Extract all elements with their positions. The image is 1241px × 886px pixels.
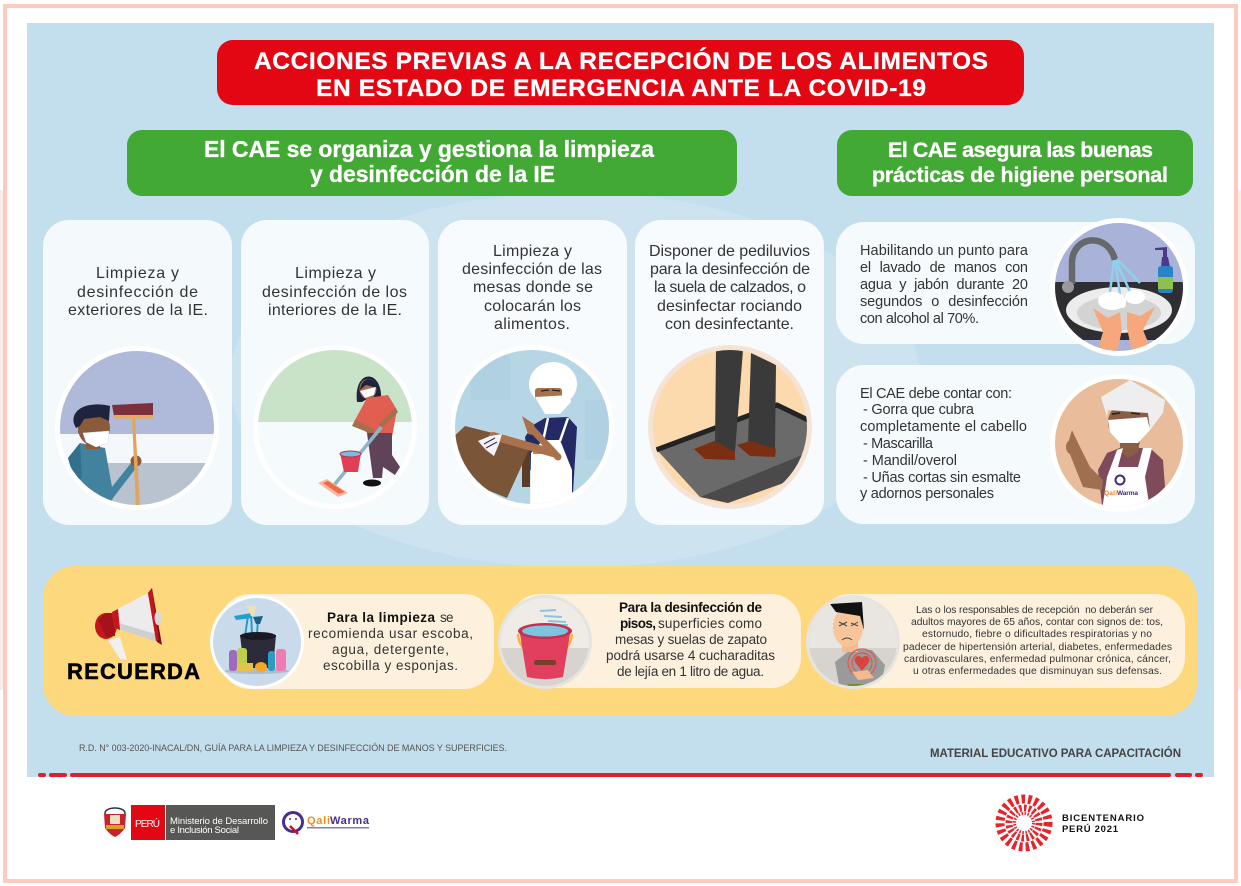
icon: lavado de manos xyxy=(1050,218,1188,356)
text: implementos: - Mandil/overol xyxy=(863,453,957,469)
text: desinfección: Para la desinfección de xyxy=(619,600,762,615)
text: lavado de manos: segundos o desinfección xyxy=(860,294,1028,310)
panel: limpieza de interiores xyxy=(241,220,429,525)
text: implementos: - Uñas cortas sin esmalte xyxy=(863,470,1021,486)
text: lavado de manos xyxy=(860,243,1029,327)
text: interiores: desinfección de los xyxy=(262,284,407,301)
text: responsables: estornudo, fiebre o dificultades respiratorias y no xyxy=(922,629,1152,640)
callout: responsables de recepción xyxy=(806,594,1185,692)
text: mesas: desinfección de las xyxy=(462,261,602,278)
text: implementos: y adornos personales xyxy=(860,486,994,502)
text: pediluvios: para la desinfección de xyxy=(650,261,810,278)
text: responsables: cardiovasculares, enfermedad pulmonar crónica, cáncer, xyxy=(904,654,1171,665)
panel: pediluvios xyxy=(635,220,824,525)
heading: higiene personal: El CAE asegura las buenas xyxy=(888,138,1153,162)
text: desinfección: mesas y suelas de zapato xyxy=(615,632,767,647)
text: desinfección: pisos, xyxy=(620,616,656,631)
panel: limpieza de exteriores xyxy=(43,220,232,525)
heading: higiene personal: prácticas de higiene personal xyxy=(872,163,1168,187)
text: implementos: - Mascarilla xyxy=(863,436,934,452)
icon: persona limpiando mesa xyxy=(455,350,609,504)
text: limpieza: se xyxy=(440,610,454,625)
text: material educativo: MATERIAL EDUCATIVO PARA CAPACITACIÓN xyxy=(930,747,1181,760)
text: pediluvios: Disponer de pediluvios xyxy=(649,243,810,260)
icon: persona con mandil xyxy=(1050,374,1188,512)
text: exteriores xyxy=(68,265,208,319)
text: mesas: alimentos. xyxy=(494,316,570,333)
text: implementos: - Gorra que cubra xyxy=(863,402,975,418)
icon: productos de limpieza xyxy=(210,595,304,689)
text: exteriores: desinfección de xyxy=(77,284,198,301)
text: desinfección: de lejía en 1 litro de agua. xyxy=(617,664,764,679)
text: pediluvios: desinfectar rociando xyxy=(657,298,802,315)
text: responsables xyxy=(903,605,1172,677)
icon: pies en pediluvio xyxy=(648,345,815,510)
title banner: EN ESTADO DE EMERGENCIA ANTE LA COVID-19 xyxy=(316,75,926,102)
text: responsables: padecer de hipertensión arterial, diabetes, enfermedades xyxy=(903,642,1172,653)
logo: ministerio: Ministerio de Desarrollo xyxy=(170,816,268,827)
logo: QaliWarma en mandil xyxy=(1104,476,1138,497)
text: interiores xyxy=(262,265,407,319)
heading: limpieza y desinfección xyxy=(127,130,737,196)
text: limpieza xyxy=(308,610,473,673)
text: responsables: adultos mayores de 65 años, contar con signos de: tos, xyxy=(911,617,1163,628)
panel: lavado de manos xyxy=(836,218,1195,356)
logo: ministerio: PERÚ xyxy=(135,817,160,830)
text: interiores: interiores de la IE. xyxy=(268,302,402,319)
text: referencia normativa: R.D. N° 003-2020-INACAL/DN, GUÍA PARA LA LIMPIEZA Y DESINFECCIÓN DE MANOS Y SUPERFICIES. xyxy=(79,743,507,753)
text: implementos: completamente el cabello xyxy=(860,419,1027,435)
text: mesas: colocarán los xyxy=(484,298,581,315)
title banner xyxy=(217,40,1024,105)
callout: desinfección xyxy=(498,594,801,690)
text: lavado de manos: con alcohol al 70%. xyxy=(860,311,979,327)
text: pediluvios: la suela de calzados, o xyxy=(654,279,806,296)
text: responsables: Las o los responsables de recepción no deberán ser xyxy=(916,605,1154,616)
logo: escudo del Perú xyxy=(104,808,126,837)
text: lavado de manos: el lavado de manos con xyxy=(860,260,1028,276)
logo: Qali Warma: Warma xyxy=(330,815,370,827)
label: recuerda: RECUERDA xyxy=(67,659,200,684)
text: limpieza: recomienda usar escoba, xyxy=(308,626,473,641)
text: limpieza: Para la limpieza xyxy=(327,610,435,625)
heading: limpieza y desinfección: y desinfección de la IE xyxy=(310,161,555,187)
logo: Qali Warma: Qali xyxy=(307,815,330,827)
text: responsables: u otras enfermedades que disminuyan sus defensas. xyxy=(913,666,1162,677)
text: implementos xyxy=(860,386,1027,502)
logo: QaliWarma en mandil: Warma xyxy=(1117,490,1138,497)
icon: balde con lejía xyxy=(498,595,592,690)
panel: implementos del CAE xyxy=(836,365,1195,524)
text: limpieza: escobilla y esponjas. xyxy=(323,658,458,673)
logo: QaliWarma en mandil: Qali xyxy=(1104,490,1117,497)
panel: recuerda xyxy=(43,566,1197,716)
text: pediluvios xyxy=(649,243,810,333)
callout: limpieza xyxy=(210,594,494,689)
text: limpieza: agua, detergente, xyxy=(332,642,449,657)
text: interiores: Limpieza y xyxy=(295,265,376,282)
logo: Qali Warma xyxy=(284,812,370,834)
text: mesas xyxy=(462,243,602,333)
text: desinfección xyxy=(606,600,775,679)
title banner: ACCIONES PREVIAS A LA RECEPCIÓN DE LOS ALIMENTOS xyxy=(254,47,988,75)
text: implementos: El CAE debe contar con: xyxy=(860,386,1012,402)
red divider line xyxy=(38,773,1203,777)
icon: mujer trapeando xyxy=(253,345,420,510)
logo: Bicentenario xyxy=(1000,799,1144,847)
text: desinfección: superficies como xyxy=(658,616,762,631)
logo: ministerio: e Inclusión Social xyxy=(170,825,239,836)
heading: limpieza y desinfección: El CAE se organiza y gestiona la limpieza xyxy=(204,136,654,162)
text: mesas: mesas donde se xyxy=(473,279,593,296)
text: pediluvios: con desinfectante. xyxy=(665,316,794,333)
icon: niño con escoba xyxy=(55,345,220,513)
text: lavado de manos: agua y jabón durante 20 xyxy=(860,277,1028,293)
panel: limpieza de mesas xyxy=(438,220,627,525)
icon: persona con malestar xyxy=(806,595,900,692)
icon: megáfono xyxy=(95,588,162,660)
logo: Bicentenario: BICENTENARIO xyxy=(1062,813,1144,824)
logo: Bicentenario: PERÚ 2021 xyxy=(1062,823,1119,835)
text: exteriores: Limpieza y xyxy=(96,265,179,282)
heading: higiene personal xyxy=(837,130,1193,196)
text: exteriores: exteriores de la IE. xyxy=(68,302,208,319)
text: desinfección: podrá usarse 4 cucharaditas xyxy=(606,648,775,663)
text: mesas: Limpieza y xyxy=(493,243,572,260)
logo: ministerio xyxy=(131,805,275,840)
text: lavado de manos: Habilitando un punto para xyxy=(860,243,1029,259)
